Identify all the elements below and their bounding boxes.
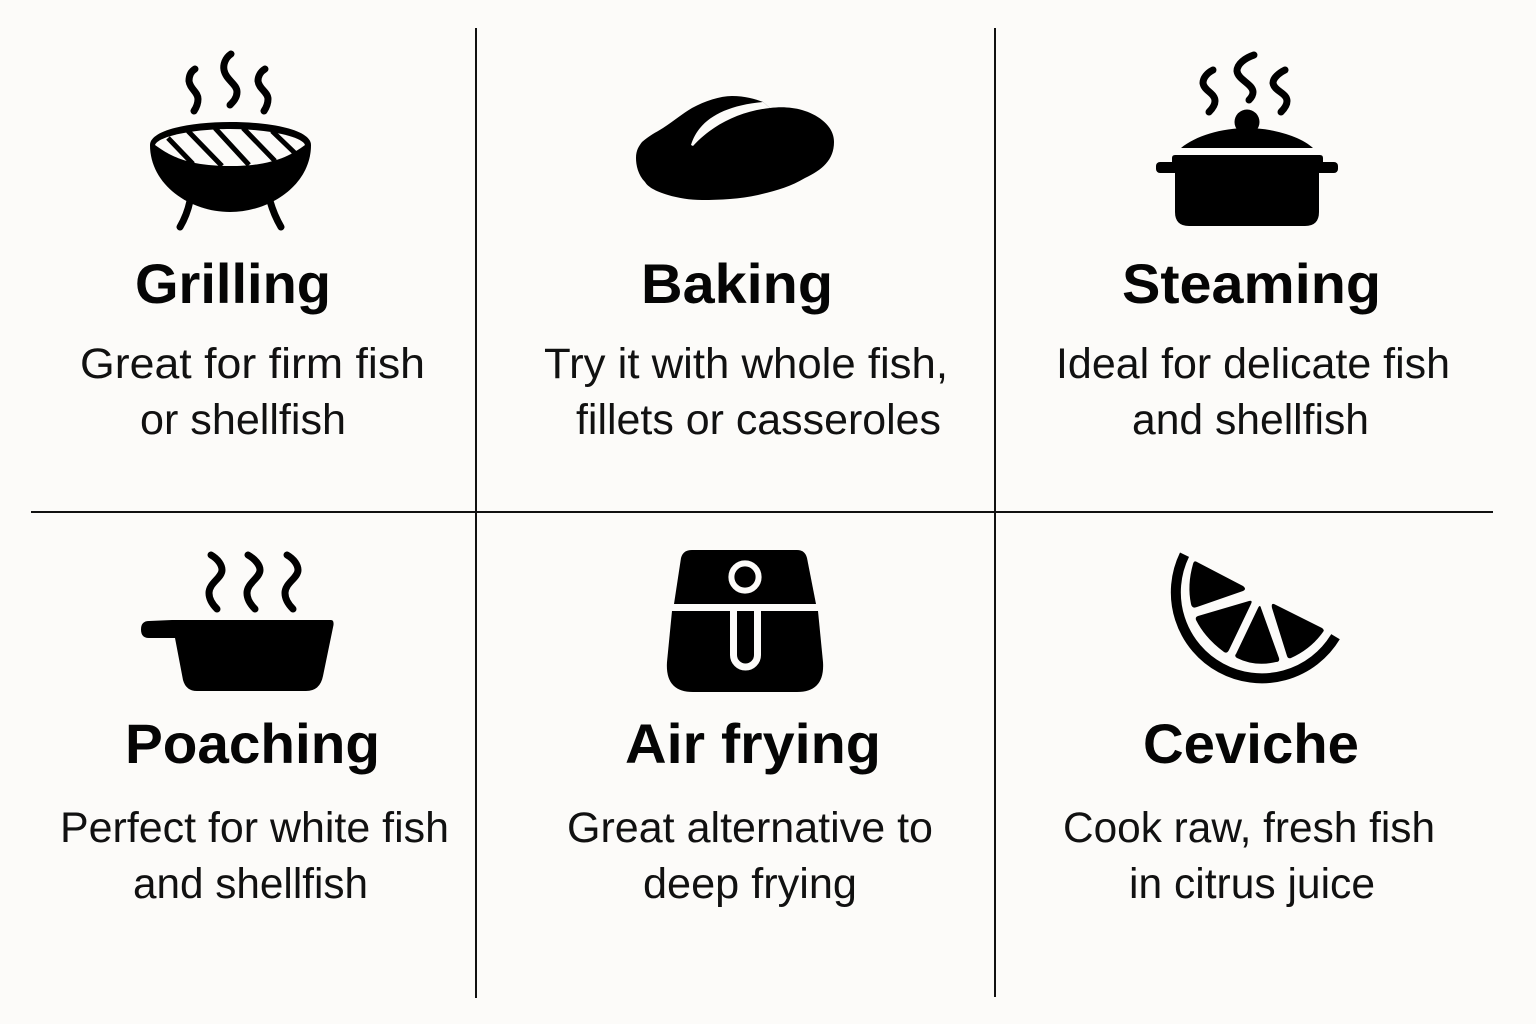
icon: steaming pot <box>1156 55 1338 226</box>
panel: grilling <box>80 54 425 444</box>
text: steaming description <box>1056 340 1450 444</box>
panel: baking <box>544 96 948 444</box>
icon: bread loaf <box>636 96 834 200</box>
text: steaming description: and shellfish <box>1132 396 1369 444</box>
text: baking description: Try it with whole fish, <box>544 340 948 388</box>
text: grilling description: or shellfish <box>140 396 346 444</box>
heading: Grilling: Grilling <box>135 252 331 315</box>
text: poaching description: Perfect for white fish <box>60 804 449 852</box>
panel: steaming <box>1056 55 1450 444</box>
text: steaming description: Ideal for delicate fish <box>1056 340 1450 388</box>
text: poaching description: and shellfish <box>133 860 368 908</box>
text: ceviche description: in citrus juice <box>1129 860 1375 908</box>
text: air frying description: deep frying <box>643 860 857 908</box>
heading: Ceviche: Ceviche <box>1143 712 1359 775</box>
icon: grill <box>150 54 311 227</box>
icon: air fryer <box>667 550 823 692</box>
text: ceviche description <box>1063 804 1435 908</box>
heading: Steaming: Steaming <box>1122 252 1381 315</box>
text: ceviche description: Cook raw, fresh fish <box>1063 804 1435 852</box>
text: baking description: fillets or casseroles <box>576 396 941 444</box>
panel: ceviche <box>1063 555 1435 908</box>
panel: poaching <box>60 555 449 908</box>
heading: Poaching: Poaching <box>125 712 380 775</box>
panel: air frying <box>567 550 933 908</box>
text: grilling description <box>80 340 425 444</box>
icon: citrus slice <box>1176 555 1336 678</box>
text: air frying description: Great alternative to <box>567 804 933 852</box>
text: baking description <box>544 340 948 444</box>
text: grilling description: Great for firm fish <box>80 340 425 388</box>
heading: Baking: Baking <box>641 252 833 315</box>
heading: Air frying: Air frying <box>625 712 881 775</box>
text: air frying description <box>567 804 933 908</box>
icon: poaching pan <box>141 555 334 691</box>
text: poaching description <box>60 804 449 908</box>
